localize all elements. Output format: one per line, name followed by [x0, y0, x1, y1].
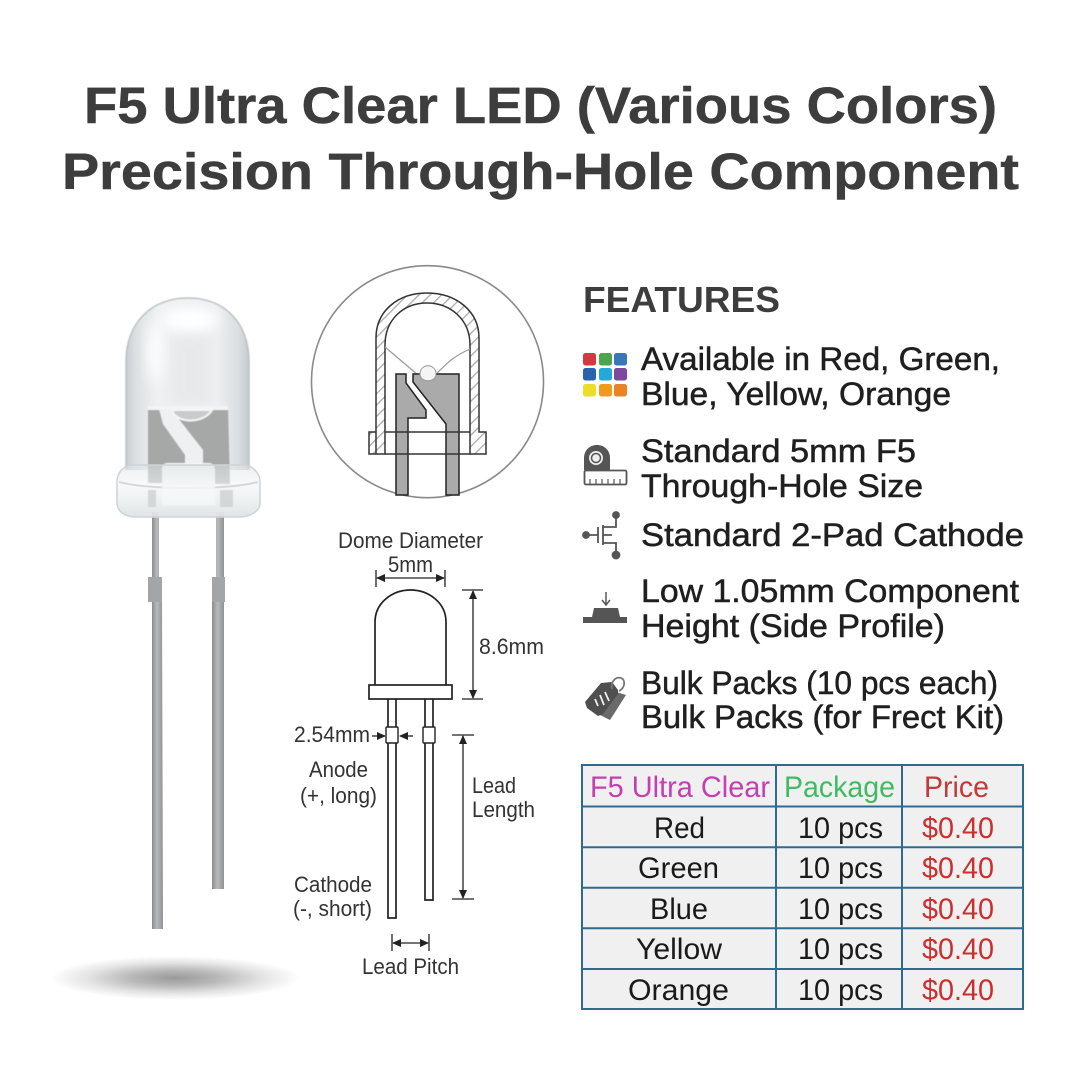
dimension drawing — [293, 528, 544, 979]
row: green: 10 pcs — [798, 852, 883, 885]
feature: bulk packs: Bulk Packs (10 pcs each) — [641, 665, 998, 701]
2.54mm dimension — [294, 722, 413, 747]
features heading: FEATURES — [583, 279, 780, 320]
lead pitch dimension: Lead Pitch — [362, 954, 459, 979]
row: orange: $0.40 — [922, 974, 994, 1007]
lead length dimension: Length — [472, 797, 535, 822]
height dimension: 8.6mm — [479, 634, 544, 659]
feature: height: Height (Side Profile) — [641, 608, 945, 644]
row: yellow: $0.40 — [922, 933, 994, 966]
row: green — [638, 852, 994, 885]
anode label: Anode — [309, 757, 368, 782]
anode label — [300, 757, 377, 808]
row: blue — [650, 893, 994, 926]
title: F5 Ultra Clear LED (Various Colors) — [84, 77, 997, 134]
leads — [148, 512, 225, 929]
bond wires — [385, 347, 470, 375]
feature: cathode — [583, 512, 1024, 558]
LED outline — [369, 590, 452, 918]
icon: low profile component — [583, 592, 627, 623]
table header: Price — [924, 771, 989, 804]
left lead frame — [396, 374, 426, 495]
hatched dome wall — [369, 293, 486, 454]
table header: Package — [784, 771, 895, 804]
cathode label — [293, 872, 372, 921]
price table — [582, 765, 1023, 1009]
right lead frame — [413, 374, 459, 495]
row: orange: 10 pcs — [798, 974, 883, 1007]
anode label: (+, long) — [300, 783, 377, 808]
feature: size — [584, 433, 923, 504]
row: yellow: 10 pcs — [798, 933, 883, 966]
feature: bulk packs: Bulk Packs (for Frect Kit) — [641, 699, 1004, 735]
lead length dimension — [452, 735, 535, 899]
row: blue: $0.40 — [922, 893, 994, 926]
table header — [590, 771, 989, 804]
row: blue: Blue — [650, 893, 708, 926]
icon: price tags — [585, 678, 626, 720]
table header: F5 Ultra Clear — [590, 771, 770, 804]
clear dome — [126, 298, 249, 470]
dome diameter dimension: Dome Diameter — [338, 528, 483, 553]
cross-section circle — [312, 266, 544, 498]
title: Precision Through-Hole Component — [62, 143, 1019, 200]
cathode label: (-, short) — [293, 896, 372, 921]
feature: height: Low 1.05mm Component — [641, 573, 1019, 609]
lead frame — [148, 406, 230, 486]
feature: bulk packs — [585, 665, 1004, 735]
dome diameter dimension: 5mm — [388, 552, 433, 577]
row: red: 10 pcs — [798, 812, 883, 845]
row: red — [654, 812, 994, 845]
row: orange: Orange — [628, 974, 729, 1007]
2.54mm dimension: 2.54mm — [294, 722, 370, 747]
flange — [117, 465, 260, 517]
LED chip — [420, 366, 436, 381]
feature: colors — [583, 341, 1000, 412]
icon: transistor symbol — [583, 512, 620, 558]
row: green: $0.40 — [922, 852, 994, 885]
cathode label: Cathode — [294, 872, 372, 897]
icon: tape measure — [584, 445, 626, 484]
floor shadow — [50, 956, 300, 1000]
feature: size: Standard 5mm F5 — [641, 433, 916, 469]
feature: size: Through-Hole Size — [641, 468, 923, 504]
lead pitch dimension — [362, 934, 459, 979]
lead length dimension: Lead — [472, 773, 516, 798]
feature: colors: Blue, Yellow, Orange — [641, 376, 951, 412]
row: orange — [628, 974, 994, 1007]
feature: height — [583, 573, 1019, 644]
row: red: Red — [654, 812, 705, 845]
row: blue: 10 pcs — [798, 893, 883, 926]
title — [62, 77, 1019, 200]
height dimension — [462, 590, 544, 699]
dome diameter dimension — [338, 528, 483, 587]
feature: colors: Available in Red, Green, — [641, 341, 1000, 377]
icon: color grid — [583, 353, 627, 396]
row: yellow — [636, 933, 994, 966]
feature: cathode: Standard 2-Pad Cathode — [641, 517, 1024, 553]
row: red: $0.40 — [922, 812, 994, 845]
flange lines — [385, 432, 470, 454]
LED product photo — [50, 298, 300, 1000]
row: green: Green — [638, 852, 719, 885]
row: yellow: Yellow — [636, 933, 722, 966]
